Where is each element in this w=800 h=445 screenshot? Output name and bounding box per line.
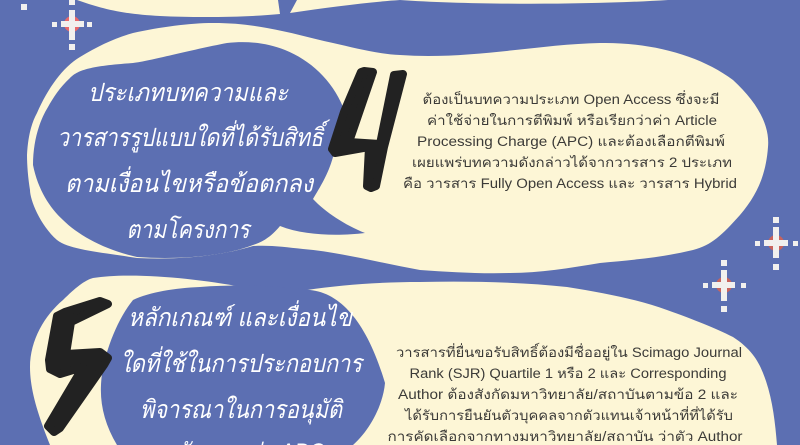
item 4 heading: วารสารรูปแบบใดที่ได้รับสิทธิ์ (57, 119, 330, 153)
item 4 blue question bubble (33, 42, 365, 258)
item 4 cream speech shape (27, 23, 768, 273)
item 4 body text (403, 90, 737, 191)
item 4 heading: ตามเงื่อนไขหรือข้อตกลง (65, 166, 315, 198)
item 5 body text: Author ต้องสังกัดมหาวิทยาลัย/สถาบันตามข้อ 2 และ (398, 387, 738, 402)
item 5 body text (388, 342, 743, 444)
item 4 body text: ต้องเป็นบทความประเภท Open Access ซึ่งจะมี (422, 90, 720, 107)
item 5 body text: การคัดเลือกจากทางมหาวิทยาลัย/สถาบัน ว่าตัว Author (388, 429, 743, 444)
item 4 heading: ประเภทบทความและ (88, 79, 289, 107)
item 5 body text: Rank (SJR) Quartile 1 หรือ 2 และ Corresponding (410, 366, 726, 381)
icon: sparkle top left corner (21, 4, 27, 10)
item 5 heading: หลักเกณฑ์ และเงื่อนไข (128, 300, 354, 332)
item 4 body text: คือ วารสาร Fully Open Access และ วารสาร Hybrid (403, 176, 737, 191)
panel: item 5 (30, 276, 777, 445)
item 5 body text: ได้รับการยืนยันตัวบุคคลจากตัวแทนเจ้าหน้าที่ที่ได้รับ (404, 406, 733, 424)
panel: item 4 (27, 23, 768, 273)
item 5 heading (120, 300, 364, 445)
icon: sparkle lower right (703, 260, 746, 312)
item 5 body text: วารสารที่ยื่นขอรับสิทธิ์ต้องมีชื่ออยู่ใน Scimago Journal (396, 342, 742, 361)
number 4 (332, 71, 403, 188)
item 4 heading (57, 79, 330, 244)
panel: previous item bubble remnant (77, 0, 668, 17)
item 4 body text: ค่าใช้จ่ายในการตีพิมพ์ หรือเรียกว่าค่า Article (427, 112, 717, 128)
item 5 heading: พิจารณาในการอนุมัติ (140, 395, 344, 425)
number 5 (48, 301, 108, 432)
item 5 cream speech shape (30, 276, 777, 445)
item 4 body text: Processing Charge (APC) และต้องเลือกตีพิมพ์ (417, 133, 725, 149)
item 4 heading: ตามโครงการ (126, 215, 252, 244)
item 4 body text: เผยแพร่บทความดังกล่าวได้จากวารสาร 2 ประเภท (412, 155, 732, 170)
item 5 blue question bubble (101, 286, 385, 445)
icon: sparkle right (755, 217, 798, 270)
item 5 heading: ใดที่ใช้ในการประกอบการ (120, 346, 364, 378)
icon: sparkle upper left (52, 0, 92, 50)
